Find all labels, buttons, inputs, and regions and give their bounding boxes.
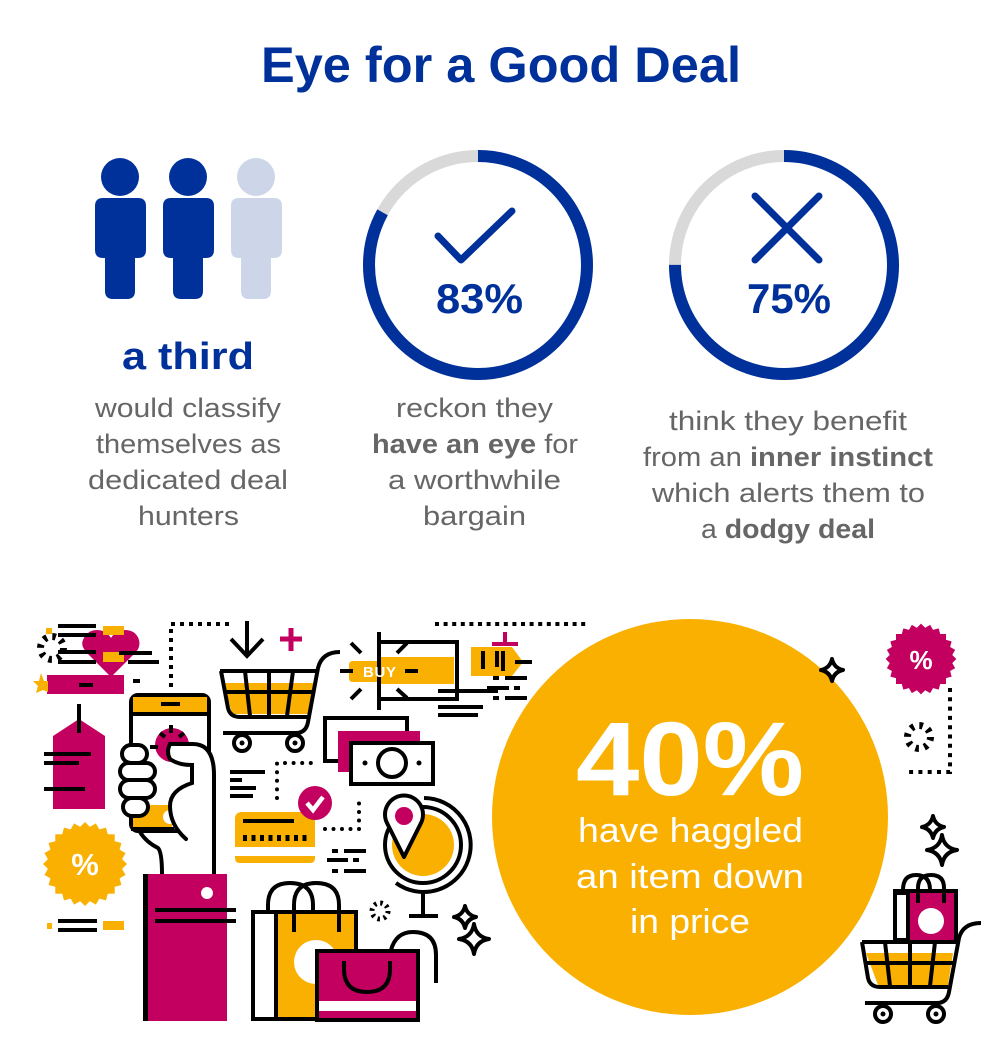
icon: magenta percent burst: % — [909, 645, 933, 675]
text: eye for a bargain: have an eye for — [372, 429, 578, 459]
donut chart: 75% — [675, 156, 893, 374]
callout: 40 percent circle: an item down — [576, 858, 804, 896]
icon: check mark — [438, 211, 512, 260]
text: eye for a bargain: bargain — [423, 501, 526, 531]
icon: round dotted line — [277, 763, 312, 798]
text: deal hunters description: themselves as — [96, 429, 281, 459]
callout: 40 percent circle — [492, 619, 888, 1015]
callout: 40 percent circle: in price — [630, 903, 750, 941]
icon: sparkles — [454, 906, 489, 954]
panel: 75 percent — [643, 156, 933, 544]
text: deal hunters description — [88, 393, 288, 531]
text: inner instinct: a dodgy deal — [701, 514, 875, 544]
icon: buy tag: BUY — [363, 664, 396, 681]
icon: buy tag — [340, 632, 498, 715]
panel: a third of people — [88, 158, 288, 531]
icon: yellow percent burst — [43, 822, 127, 906]
icon: shopping cart with arrow — [220, 621, 340, 751]
icon: right spinner — [908, 726, 930, 748]
callout: 40 percent circle: 40% — [576, 701, 804, 818]
icon: dotted connector — [325, 795, 359, 829]
stat: 75%: 75% — [747, 275, 831, 322]
icon: right dotted line — [904, 688, 950, 772]
title: Eye for a Good Deal — [261, 37, 741, 93]
icon: banknotes — [325, 718, 433, 784]
text: eye for a bargain: reckon they — [396, 393, 554, 423]
icon: top sparkle — [821, 659, 843, 681]
icon: dotted line — [171, 624, 230, 687]
icon: globe with pin — [385, 796, 471, 916]
text: eye for a bargain — [372, 393, 578, 531]
icon: credit card — [235, 786, 332, 863]
icon: dash lines — [327, 851, 366, 871]
icon: yellow shopping bag — [253, 883, 356, 1019]
icon: magenta percent burst — [886, 624, 956, 694]
text: deal hunters description: would classify — [94, 393, 282, 423]
icon: top-right dotted line — [435, 622, 586, 626]
text: deal hunters description: hunters — [138, 501, 239, 531]
callout: 40 percent circle: have haggled — [578, 812, 803, 850]
text: deal hunters description: dedicated deal — [88, 465, 288, 495]
icon: right sparkles — [922, 816, 957, 865]
icon: cart with bag — [862, 875, 981, 1022]
text: inner instinct: which alerts them to — [651, 478, 925, 508]
stat: 83%: 83% — [436, 275, 523, 322]
icon: text lines — [230, 772, 265, 796]
icon: three people — [95, 158, 282, 299]
icon: small line row — [47, 921, 124, 930]
icon: sleeve — [143, 874, 236, 1021]
text: inner instinct: from an inner instinct — [643, 442, 933, 472]
icon: small spinner — [372, 903, 388, 919]
text: inner instinct: think they benefit — [669, 406, 908, 436]
text: inner instinct — [643, 406, 933, 544]
text: eye for a bargain: a worthwhile — [388, 465, 561, 495]
icon: cross — [755, 196, 819, 260]
panel: 83 percent — [369, 156, 587, 531]
icon: heart with lines — [33, 626, 159, 694]
icon: small tag — [471, 632, 532, 698]
icon: yellow percent burst: % — [71, 847, 99, 882]
donut chart: 83% — [369, 156, 587, 374]
icon: magenta shopping bag — [317, 932, 436, 1020]
icon: hand holding phone — [120, 695, 214, 874]
icon: price tag — [44, 704, 105, 809]
stat: a third: a third — [122, 336, 254, 378]
illustration: shopping icons — [33, 621, 981, 1022]
